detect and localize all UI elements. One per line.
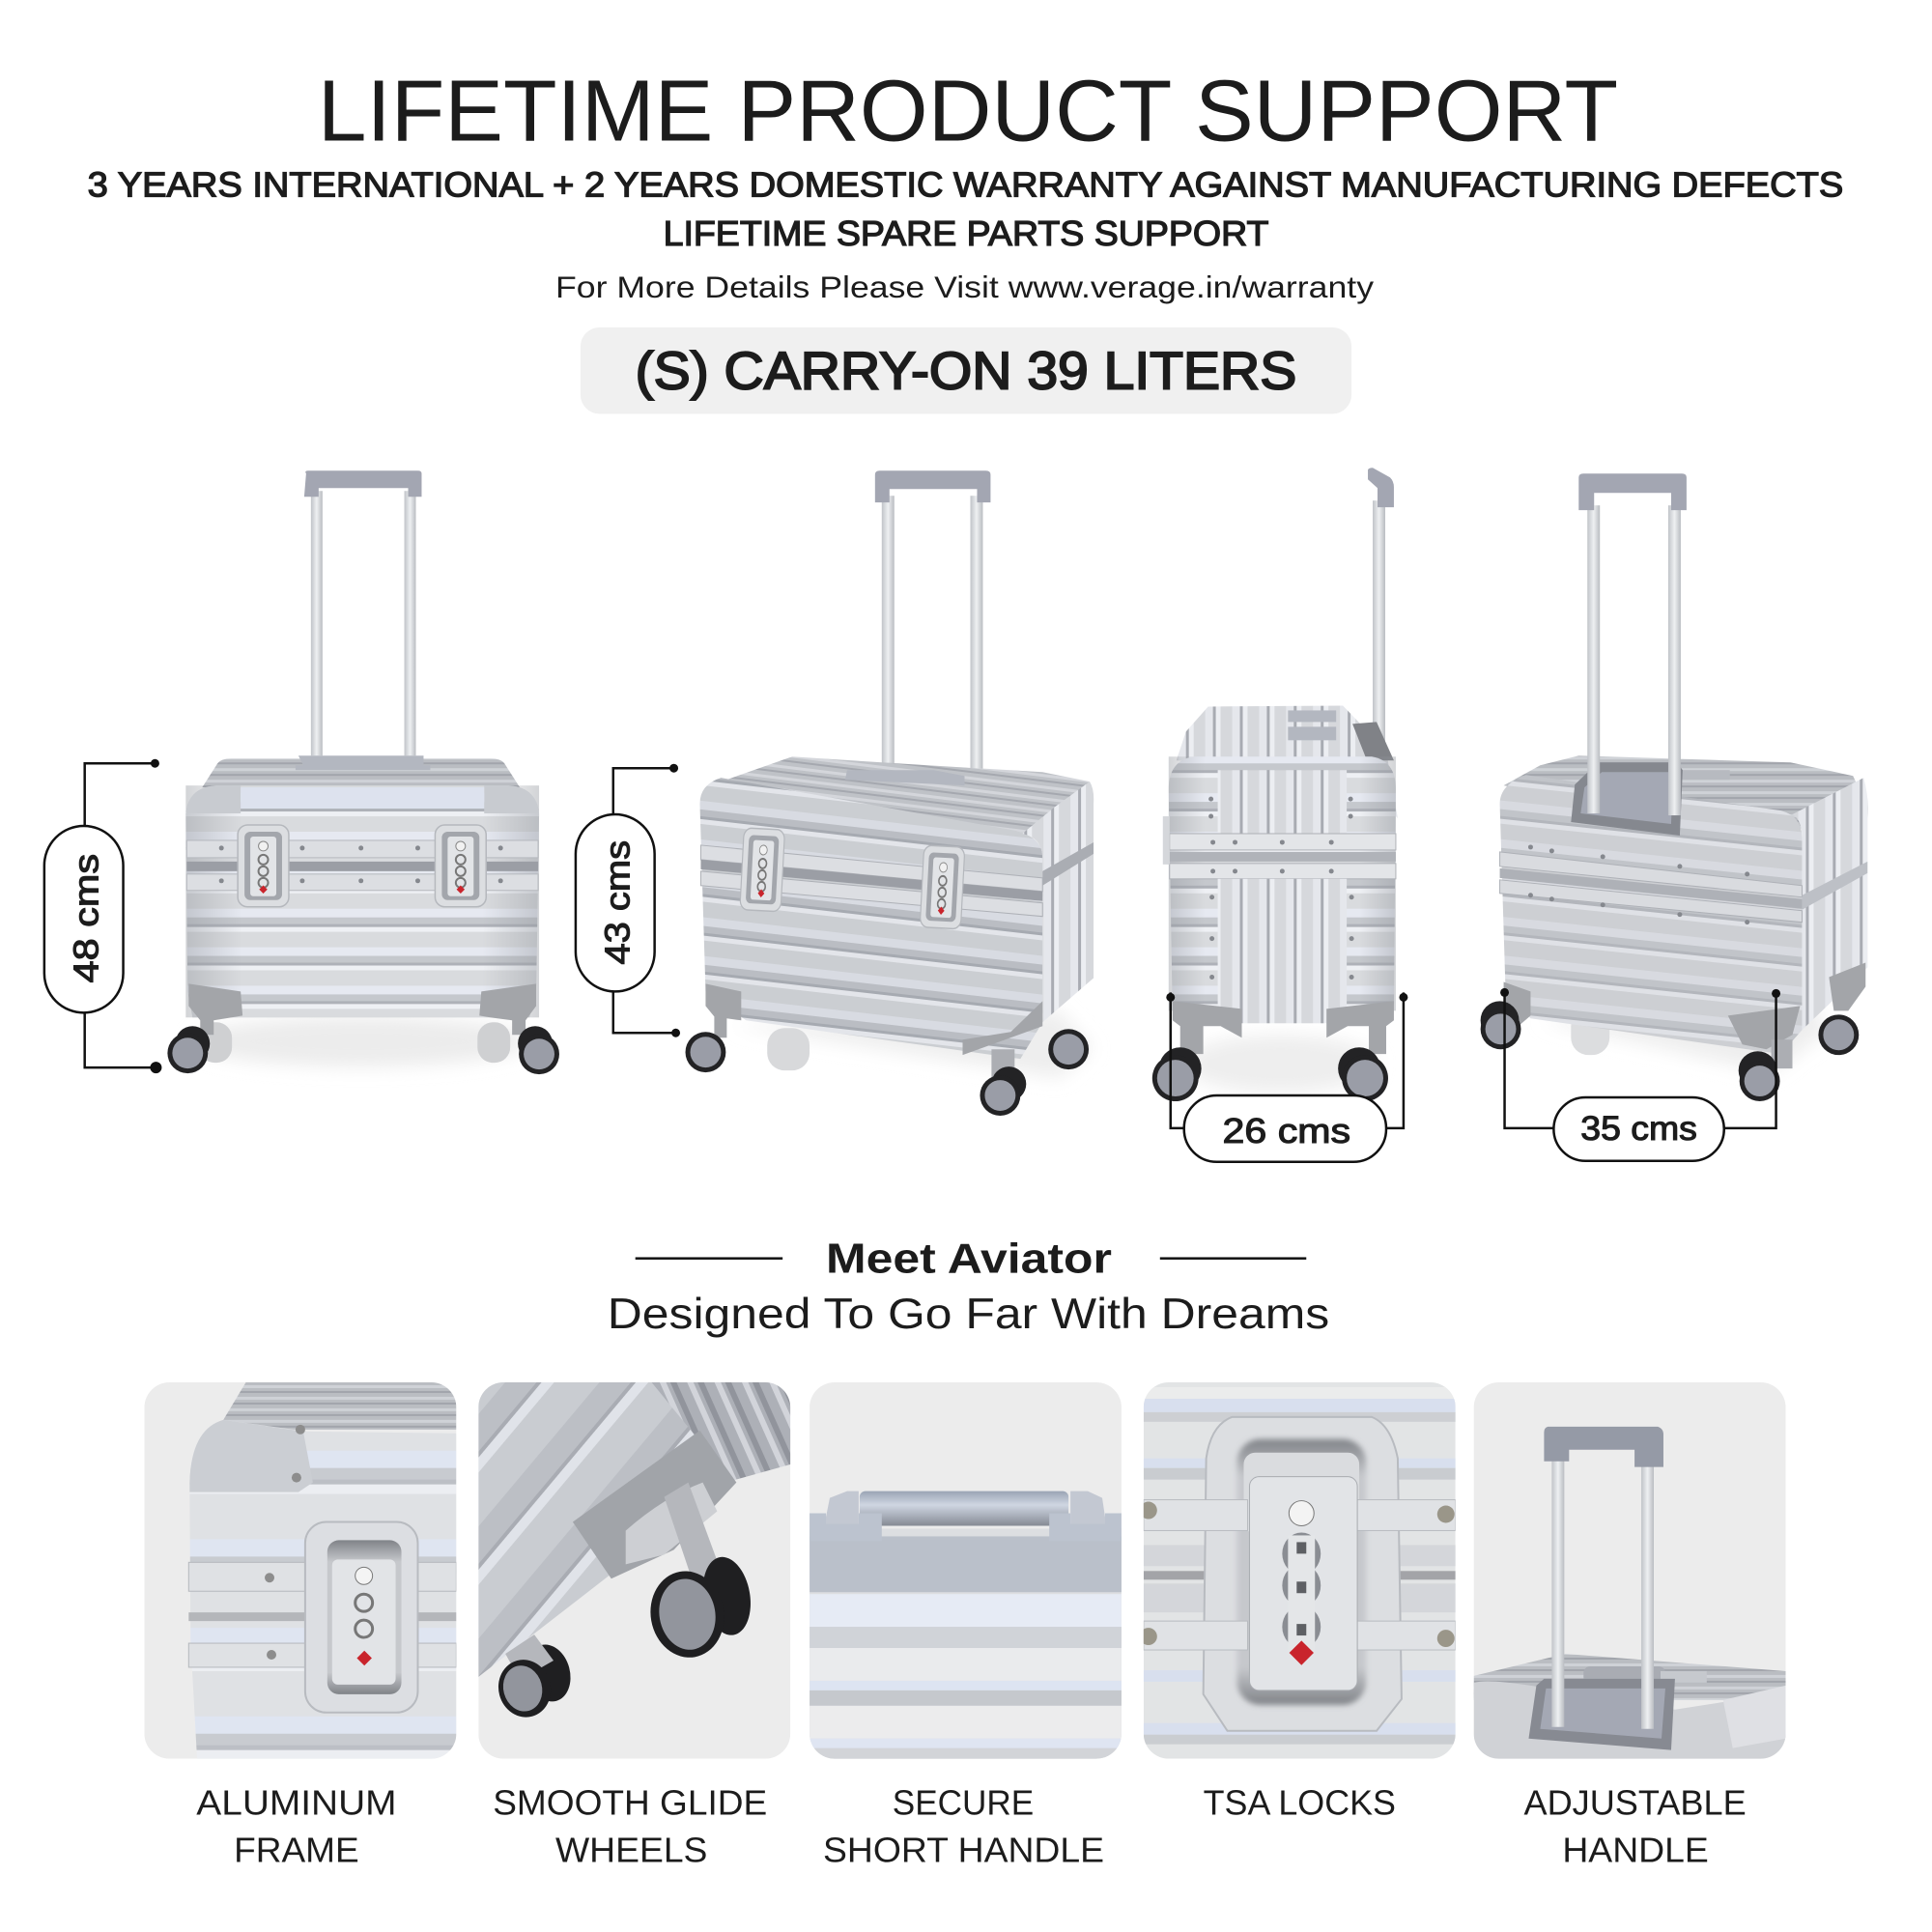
warranty line: 3 YEARS INTERNATIONAL + 2 YEARS DOMESTIC WARRANTY AGAINST MANUFACTURING DEFECTS	[88, 165, 1843, 204]
panel: smooth glide wheels	[478, 1377, 791, 1759]
panel: TSA locks	[1140, 1382, 1456, 1759]
dimension: height 48 cms	[44, 759, 161, 1073]
panel: secure short handle	[808, 1382, 1122, 1765]
caption: TSA locks: TSA LOCKS	[1204, 1783, 1396, 1822]
panel: aluminum frame	[144, 1372, 456, 1764]
suitcase: rear view	[1481, 473, 1868, 1101]
dimension: width 35 cms	[1500, 988, 1780, 1161]
caption: aluminum frame	[196, 1783, 397, 1869]
caption: secure short handle: SECURE	[893, 1783, 1034, 1822]
dimension: width 35 cms: 35 cms	[1580, 1110, 1697, 1148]
dimension: height 48 cms: 48 cms	[68, 854, 106, 982]
tagline: Designed To Go Far With Dreams	[608, 1289, 1329, 1338]
heading: Meet Aviator: Meet Aviator	[826, 1235, 1112, 1282]
details link line: For More Details Please Visit www.verage.in/warranty	[555, 270, 1374, 304]
size badge: (S) CARRY-ON 39 LITERS	[636, 341, 1296, 401]
caption: aluminum frame: ALUMINUM	[196, 1783, 397, 1822]
caption: smooth glide wheels: SMOOTH GLIDE	[493, 1783, 767, 1822]
caption: smooth glide wheels	[493, 1783, 767, 1869]
caption: smooth glide wheels: WHEELS	[555, 1831, 707, 1869]
suitcase: side view	[1152, 468, 1398, 1101]
caption: adjustable handle: ADJUSTABLE	[1523, 1783, 1747, 1822]
dimension: depth 43 cms	[576, 764, 680, 1037]
caption: adjustable handle: HANDLE	[1562, 1831, 1709, 1869]
panel: adjustable handle	[1474, 1382, 1786, 1765]
caption: adjustable handle	[1523, 1783, 1747, 1869]
suitcase: three-quarter view	[686, 470, 1094, 1116]
dimension: width 26 cms	[1166, 992, 1407, 1162]
caption: secure short handle: SHORT HANDLE	[823, 1831, 1104, 1869]
size badge	[581, 327, 1351, 414]
title: LIFETIME PRODUCT SUPPORT	[318, 63, 1618, 159]
dimension: width 26 cms: 26 cms	[1223, 1112, 1350, 1151]
spare parts line: LIFETIME SPARE PARTS SUPPORT	[664, 214, 1268, 253]
dimension: depth 43 cms: 43 cms	[599, 840, 638, 965]
caption: aluminum frame: FRAME	[234, 1831, 359, 1869]
suitcase: front view	[167, 470, 559, 1074]
caption: secure short handle	[823, 1783, 1104, 1869]
